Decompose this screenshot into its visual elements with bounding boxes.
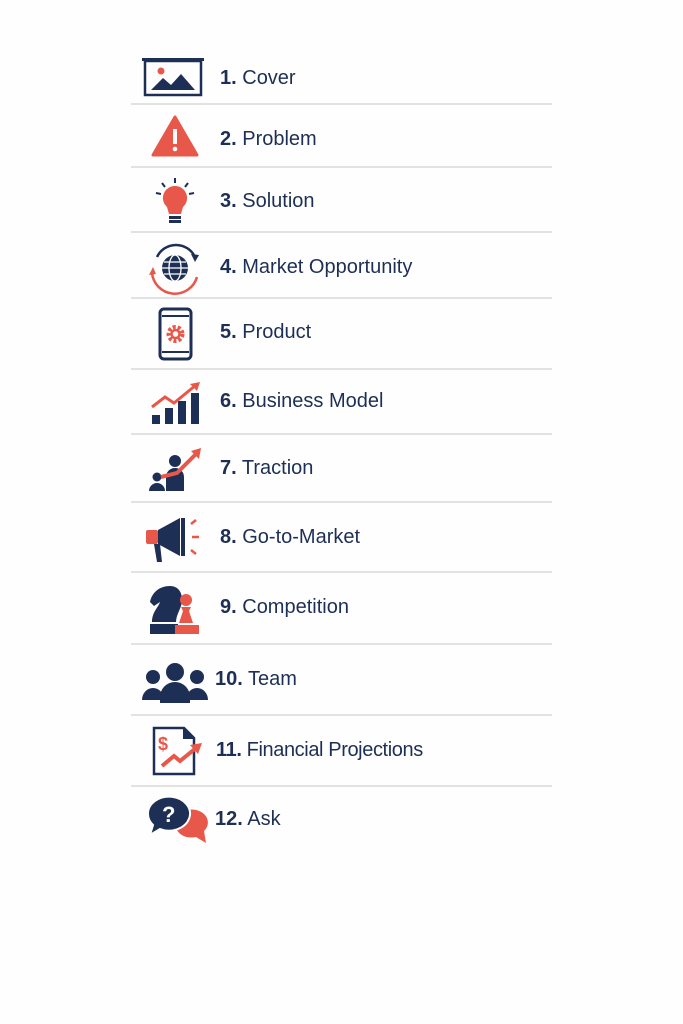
icon: traction people [149,448,201,491]
item 2: 2. Problem [220,128,317,150]
item 11: 11. Financial Projections [216,739,423,761]
icon: financial doc [152,726,202,776]
icon: globe [149,244,199,295]
icon: chess pieces [150,586,199,634]
item 12: 12. Ask [215,808,281,830]
item 7: 7. Traction [220,457,313,479]
item 6: 6. Business Model [220,390,383,412]
item 8: 8. Go-to-Market [220,526,360,548]
item 1: 1. Cover [220,67,296,89]
icon: financial doc: $ [158,734,168,754]
icon: speech bubbles: ? [162,802,175,827]
item 3: 3. Solution [220,190,315,212]
icon: phone gear [158,308,192,360]
item 10: 10. Team [215,668,297,690]
icon: team [142,663,208,703]
item 5: 5. Product [220,321,311,343]
icon: cover picture [142,58,204,96]
icon: growth chart [151,382,200,424]
item 9: 9. Competition [220,596,349,618]
icon: speech bubbles [149,798,208,843]
item 4: 4. Market Opportunity [220,256,412,278]
icon: light bulb [156,178,194,223]
icon: megaphone [146,518,199,562]
icon: warning [152,115,199,156]
